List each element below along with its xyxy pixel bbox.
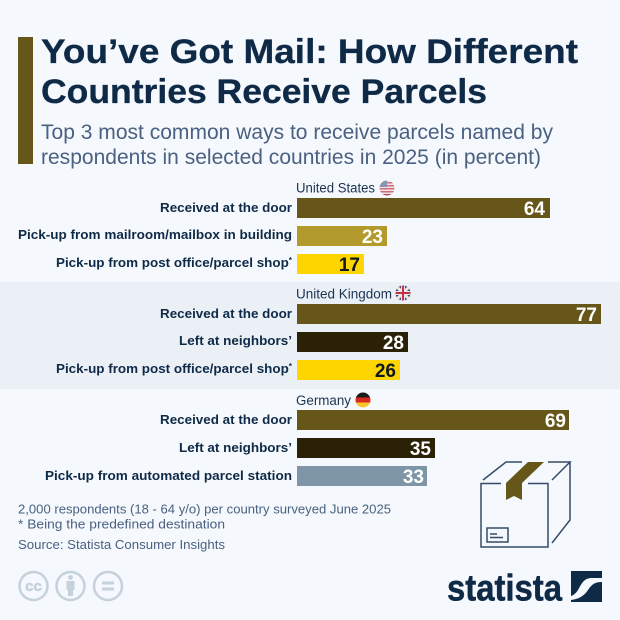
title: Countries Receive Parcels bbox=[41, 73, 487, 111]
bar row: Left at neighbors 35: 35 bbox=[410, 439, 431, 460]
icon: US flag bbox=[380, 180, 394, 196]
bar row: Received at the door 69: 69 bbox=[545, 411, 566, 432]
bar row: Left at neighbors 35 bbox=[179, 438, 435, 460]
bar row: Received at the door 69 bbox=[160, 410, 569, 432]
bar row: Received at the door 64 bbox=[160, 198, 550, 220]
bar row: Pick-up from automated parcel station 33: Pick-up from automated parcel station bbox=[45, 468, 292, 483]
country label: United States: United States bbox=[296, 180, 375, 196]
statista logo: statista bbox=[447, 568, 562, 608]
bar row: Pick-up from post office/parcel shop 26: Pick-up from post office/parcel shop bbox=[56, 361, 281, 376]
country label: United Kingdom: United Kingdom bbox=[296, 286, 392, 302]
panel background bbox=[0, 282, 620, 389]
subtitle bbox=[41, 121, 554, 169]
bar row: Pick-up from post office/parcel shop 26: 26 bbox=[375, 361, 396, 382]
bar row: Received at the door 64: 64 bbox=[524, 199, 545, 220]
bar row: Left at neighbors 28: 28 bbox=[383, 333, 404, 354]
title accent bar bbox=[18, 37, 33, 164]
bar row: Received at the door 64: Received at the door bbox=[160, 200, 292, 215]
bar row: Pick-up from post office/parcel shop 17: * bbox=[289, 256, 293, 265]
bar row: Left at neighbors 28: Left at neighbors’ bbox=[179, 333, 292, 348]
bar row: Received at the door 69: Received at the door bbox=[160, 412, 292, 427]
bar row: Received at the door 77 bbox=[160, 304, 601, 326]
icon: parcel box bbox=[481, 462, 570, 547]
icon: creative commons licence bbox=[20, 572, 122, 600]
bar row: Received at the door 77: Received at the door bbox=[160, 306, 292, 321]
bar row: Pick-up from mailroom/mailbox in building 23: 23 bbox=[362, 227, 383, 248]
bar row: Received at the door 77: 77 bbox=[576, 305, 597, 326]
panel: United Kingdom bbox=[0, 282, 620, 389]
icon: UK flag bbox=[396, 286, 410, 300]
footnotes: Source: Statista Consumer Insights bbox=[18, 537, 226, 552]
bar row: Pick-up from mailroom/mailbox in building 23: Pick-up from mailroom/mailbox in building bbox=[18, 227, 292, 242]
panel: Germany bbox=[45, 392, 569, 488]
icon: creative commons licence: cc bbox=[25, 578, 42, 595]
bar row: Pick-up from mailroom/mailbox in building 23 bbox=[18, 226, 387, 248]
country label: Germany: Germany bbox=[296, 393, 351, 408]
title: You’ve Got Mail: How Different bbox=[41, 33, 578, 71]
bar row: Pick-up from post office/parcel shop 26: * bbox=[289, 362, 293, 371]
bar row: Left at neighbors 35: Left at neighbors’ bbox=[179, 440, 292, 455]
subtitle: respondents in selected countries in 2025 (in percent) bbox=[41, 146, 541, 169]
footnotes bbox=[18, 502, 391, 552]
bar row: Pick-up from automated parcel station 33: 33 bbox=[403, 467, 424, 488]
bar row: Left at neighbors 28 bbox=[179, 332, 408, 354]
bar row: Pick-up from post office/parcel shop 26 bbox=[56, 360, 400, 382]
bar row: Pick-up from automated parcel station 33 bbox=[45, 466, 427, 488]
footnotes: * Being the predefined destination bbox=[18, 516, 225, 532]
footnotes: 2,000 respondents (18 - 64 y/o) per country surveyed June 2025 bbox=[18, 502, 391, 516]
subtitle: Top 3 most common ways to receive parcels named by bbox=[41, 121, 554, 144]
panel: United States bbox=[18, 180, 550, 276]
bar row: Pick-up from post office/parcel shop 17 bbox=[56, 254, 364, 276]
bar row: Pick-up from post office/parcel shop 17: Pick-up from post office/parcel shop bbox=[56, 255, 281, 270]
bar row: Pick-up from post office/parcel shop 17: 17 bbox=[339, 255, 360, 276]
icon: statista mark bbox=[571, 571, 602, 602]
icon: German flag bbox=[356, 392, 370, 408]
title bbox=[41, 33, 578, 111]
